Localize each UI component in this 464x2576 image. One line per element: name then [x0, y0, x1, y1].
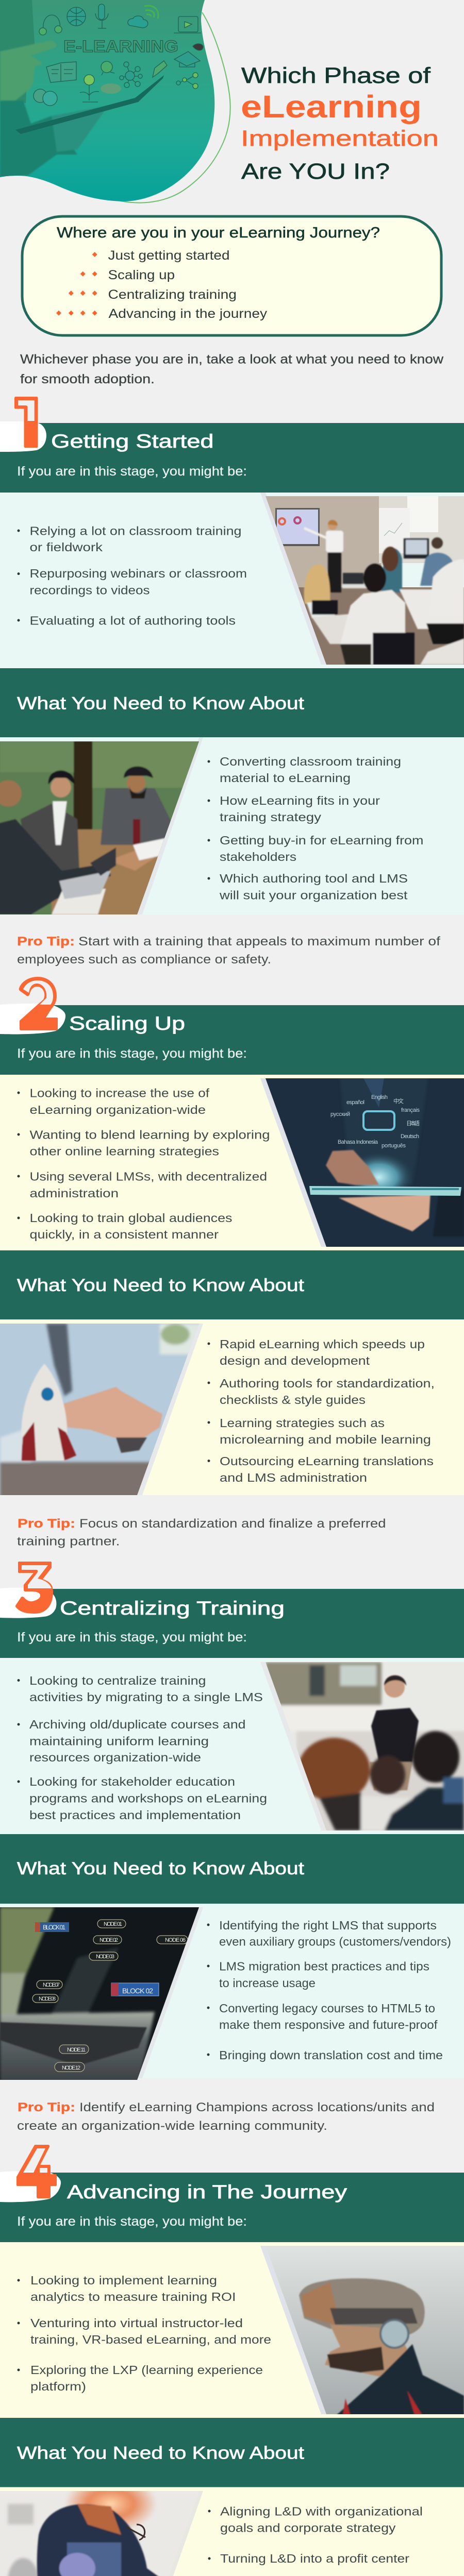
bullet list: training strategy	[220, 810, 322, 824]
bullet list	[18, 524, 247, 628]
photo: rocket and hands	[0, 1324, 206, 1499]
bullet list: Looking to increase the use of	[30, 1086, 210, 1099]
section 2 header band: Scaling Up	[69, 1013, 185, 1034]
photo: head with digital interface	[0, 2491, 199, 2576]
journey list: Centralizing training	[108, 287, 237, 302]
bullet list: Which authoring tool and LMS	[220, 872, 408, 885]
language labels: português	[382, 1143, 406, 1149]
section 4 know-about panel	[0, 2487, 464, 2576]
bullet list: Archiving old/duplicate courses and	[29, 1718, 245, 1731]
section 2 pro tip: Focus on standardization and finalize a preferred	[79, 1517, 386, 1531]
section 2 know-about band	[0, 1250, 464, 1319]
section 1 pro tip	[17, 935, 440, 967]
section 1 header band: Getting Started	[51, 431, 213, 452]
section 4 know-about band: What You Need to Know About	[17, 2443, 305, 2463]
language labels: français	[401, 1107, 420, 1113]
photo: VR double exposure	[258, 2246, 464, 2416]
section 1 know-about panel	[0, 737, 423, 914]
numeral 4	[16, 2145, 57, 2198]
photo: business meeting	[0, 741, 206, 917]
bullet list: Rapid eLearning which speeds up	[220, 1337, 425, 1351]
bullet list: analytics to measure training ROI	[30, 2290, 236, 2303]
photo: classroom	[258, 496, 464, 665]
teal blob with tablet photo	[0, 0, 222, 206]
journey list: Advancing in the journey	[108, 307, 268, 321]
language labels: 中文	[393, 1097, 404, 1105]
bullet list: Venturing into virtual instructor-led	[30, 2316, 243, 2330]
section 3 pro tip: Pro Tip:	[18, 2100, 75, 2114]
section 3 header band: Centralizing Training	[60, 1598, 285, 1619]
language labels: English	[371, 1094, 388, 1100]
diagram labels: NODE 07	[43, 1982, 60, 1988]
title: Are YOU In?	[241, 159, 390, 184]
bullet list: programs and workshops on eLearning	[29, 1792, 267, 1805]
journey box: Where are you in your eLearning Journey?	[57, 225, 380, 241]
bullet list: Evaluating a lot of authoring tools	[30, 614, 236, 628]
section 3 know-about panel	[0, 1904, 464, 2082]
bullet list: design and development	[220, 1354, 370, 1367]
section 1 know-about band	[0, 668, 464, 737]
bullet list: microlearning and mobile learning	[220, 1433, 431, 1446]
doodle icons	[34, 4, 203, 106]
bullet list: recordings to videos	[30, 583, 150, 597]
header illustration blob	[0, 0, 230, 206]
bullet list	[207, 755, 424, 902]
section 4 might-be panel	[0, 2242, 464, 2418]
bullet list: quickly, in a consistent manner	[30, 1228, 219, 1241]
bullet list: and LMS administration	[220, 1471, 367, 1484]
section 3 might-be panel	[0, 1658, 464, 1834]
section 1 header band	[0, 397, 464, 493]
bullet list: Looking to centralize training	[29, 1674, 206, 1687]
bullet list	[18, 1674, 267, 1822]
bullet list: training, VR-based eLearning, and more	[30, 2333, 271, 2346]
bullet list	[208, 2505, 423, 2576]
diagram labels	[32, 1920, 188, 2072]
diagram labels: NODE 03	[96, 1954, 114, 1960]
bullet list: Authoring tools for standardization,	[220, 1377, 435, 1390]
bullet list: Identifying the right LMS that supports	[219, 1919, 437, 1932]
numeral 2	[19, 977, 58, 1030]
language labels: español	[346, 1099, 364, 1106]
photo: presenter and audience	[258, 1662, 464, 1834]
section 1 might-be panel	[0, 493, 464, 668]
section 2 header band	[0, 977, 464, 1075]
bullet list: resources organization-wide	[29, 1751, 201, 1764]
bullet list	[207, 1337, 435, 1484]
bullet list: best practices and implementation	[29, 1808, 241, 1822]
journey list: Scaling up	[108, 268, 175, 282]
intro text: Whichever phase you are in, take a look at what you need to know	[20, 352, 444, 367]
section 4 know-about band	[0, 2418, 464, 2487]
bullet list: LMS migration best practices and tips	[219, 1960, 429, 1973]
journey box	[22, 216, 441, 335]
bullet list: will suit your organization best	[219, 888, 408, 902]
language labels: 日本語	[406, 1120, 420, 1127]
numeral 3	[15, 1562, 53, 1614]
section 4 header band	[0, 2145, 464, 2242]
section 2 might-be panel	[0, 1075, 464, 1250]
photo: laptop with node diagram	[0, 1907, 206, 2082]
bullet list: material to eLearning	[220, 771, 351, 785]
bullet list	[18, 1086, 270, 1241]
numeral 1	[14, 397, 38, 448]
bullet list: Getting buy-in for eLearning from	[220, 834, 424, 847]
bullet list	[207, 1919, 451, 2062]
bullet list: Repurposing webinars or classroom	[30, 567, 247, 580]
bullet list: activities by migrating to a single LMS	[29, 1690, 263, 1704]
section 3 header band: If you are in this stage, you might be:	[17, 1630, 247, 1645]
bullet list: to increase usage	[219, 1976, 316, 1990]
section 4 header band: Advancing in The Journey	[67, 2181, 347, 2202]
bullet list: Exploring the LXP (learning experience	[30, 2363, 263, 2377]
e-learning word: E-LEARNING	[63, 37, 178, 56]
diagram labels: NODE 01	[104, 1921, 122, 1927]
section 3 pro tip: create an organization-wide learning community.	[17, 2119, 327, 2133]
section 1 header band: If you are in this stage, you might be:	[17, 464, 247, 479]
bullet list: Relying a lot on classroom training	[30, 524, 241, 538]
bullet list: Turning L&D into a profit center	[220, 2552, 409, 2565]
section 2 know-about band: What You Need to Know About	[17, 1276, 305, 1295]
section 4 header band: If you are in this stage, you might be:	[17, 2214, 247, 2229]
diagram labels: NODE 02	[100, 1937, 118, 1943]
bullet list: Learning strategies such as	[220, 1416, 385, 1430]
diagram labels: BLOCK 01	[43, 1924, 65, 1931]
bullet list: Aligning L&D with organizational	[220, 2505, 423, 2518]
bullet list: make them responsive and future-proof	[219, 2018, 438, 2031]
section 3 know-about band: What You Need to Know About	[17, 1859, 305, 1878]
bullet list: How eLearning fits in your	[220, 794, 380, 807]
bullet list: other online learning strategies	[30, 1145, 219, 1158]
bullet list: Looking to implement learning	[30, 2274, 217, 2287]
bullet list: Outsourcing eLearning translations	[220, 1454, 434, 1468]
title: Which Phase of	[241, 63, 431, 88]
journey list	[56, 248, 268, 321]
title: eLearning	[241, 89, 422, 124]
bullet list: Converting classroom training	[220, 755, 401, 768]
section 3 pro tip: Identify eLearning Champions across locations/units and	[79, 2100, 435, 2114]
bullet list: maintaining uniform learning	[29, 1734, 209, 1748]
bullet list: checklists & style guides	[220, 1393, 366, 1406]
diagram labels: NODE 06	[165, 1937, 186, 1943]
diagram labels: NODE 11	[67, 2047, 86, 2053]
section 2 pro tip: Pro Tip:	[18, 1517, 75, 1531]
bullet list: Wanting to blend learning by exploring	[30, 1128, 270, 1142]
section 2 pro tip	[17, 1517, 386, 1549]
green outline curve	[120, 12, 230, 203]
section 1 know-about band: What You Need to Know About	[17, 693, 305, 713]
title	[241, 63, 439, 184]
journey list: Just getting started	[108, 248, 230, 263]
section 2 pro tip: training partner.	[17, 1534, 120, 1549]
section 3 header band	[0, 1562, 464, 1658]
language labels	[330, 1094, 420, 1149]
bullet list: administration	[30, 1187, 119, 1200]
diagram labels: NODE 12	[62, 2065, 80, 2071]
section 1 pro tip: Start with a training that appeals to maximum number of	[78, 935, 440, 948]
language labels: Bahasa Indonesia	[338, 1139, 378, 1145]
section 1 pro tip: Pro Tip:	[17, 935, 75, 948]
section 3 know-about band	[0, 1834, 464, 1904]
section 1 pro tip: employees such as compliance or safety.	[17, 953, 271, 967]
bullet list: stakeholders	[220, 850, 296, 863]
bullet list: even auxiliary groups (customers/vendors)	[219, 1935, 451, 1948]
language labels: русский	[330, 1111, 350, 1117]
photo: tablet with languages	[258, 1078, 464, 1248]
bullet list	[18, 2274, 271, 2393]
bullet list: Looking for stakeholder education	[29, 1775, 235, 1788]
bullet list: eLearning organization-wide	[30, 1103, 206, 1116]
bullet list: Using several LMSs, with decentralized	[30, 1170, 267, 1183]
intro text: for smooth adoption.	[20, 372, 155, 386]
section 2 header band: If you are in this stage, you might be:	[17, 1046, 247, 1061]
bullet list: Bringing down translation cost and time	[219, 2048, 443, 2062]
diagram labels: NODE 08	[39, 1996, 56, 2002]
diagram labels: BLOCK 02	[122, 1987, 153, 1995]
bullet list: Converting legacy courses to HTML5 to	[219, 2002, 435, 2015]
language labels: Deutsch	[401, 1133, 419, 1140]
title: Implementation	[241, 126, 439, 151]
intro text	[20, 352, 444, 386]
bullet list: Looking to train global audiences	[30, 1211, 232, 1225]
bullet list: or fieldwork	[30, 540, 103, 554]
section 3 pro tip	[17, 2100, 435, 2133]
bullet list: goals and corporate strategy	[220, 2521, 396, 2535]
bullet list: platform)	[30, 2380, 86, 2393]
section 2 know-about panel	[0, 1319, 464, 1499]
